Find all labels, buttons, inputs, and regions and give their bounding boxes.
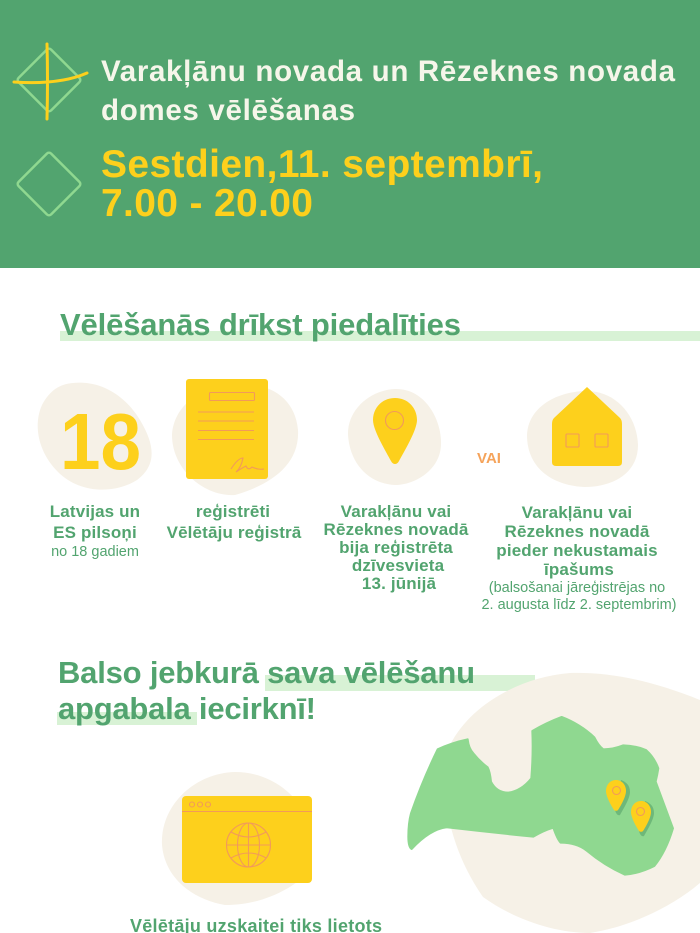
icon: house [552, 387, 622, 466]
label: Rēzeknes novadā [505, 522, 650, 541]
icon: document [186, 379, 268, 479]
label: dzīvesvieta [352, 556, 445, 575]
label: īpašums [543, 560, 614, 579]
blob [527, 391, 638, 487]
map shape [408, 717, 673, 875]
pins [606, 780, 654, 836]
label: Varakļānu vai [341, 502, 451, 521]
heading: who may participate: Vēlēšanās drīkst piedalīties [60, 307, 461, 342]
label: pieder nekustamais [496, 541, 658, 560]
label: ES pilsoņi [53, 523, 137, 542]
heading: who may participate [60, 307, 700, 342]
icon: ballot diamond with cross [14, 44, 87, 119]
header title: domes vēlēšanas [101, 94, 355, 127]
icon: map pin [373, 398, 417, 464]
blob [348, 389, 441, 485]
label: bija reģistrēta [339, 538, 453, 557]
blob [172, 384, 298, 495]
label: Latvijas un [50, 502, 140, 521]
label: (balsošanai jāreģistrējas no [489, 580, 665, 596]
label: 2. augusta līdz 2. septembrim) [481, 597, 677, 613]
item: residence [324, 389, 469, 593]
heading: vote at any polling station: apgabala iecirknī! [58, 691, 316, 726]
label: or: VAI [477, 450, 501, 467]
date and time: 7.00 - 20.00 [101, 182, 313, 225]
label: Varakļānu vai [522, 503, 632, 522]
item: voter register [167, 379, 302, 542]
header band [0, 0, 700, 268]
heading: vote at any polling station [57, 655, 535, 726]
icon: empty diamond [16, 151, 82, 217]
label: Rēzeknes novadā [324, 520, 469, 539]
blob [38, 383, 152, 490]
number 18: 18 [60, 397, 141, 486]
item: age 18 [38, 383, 152, 560]
blob [445, 673, 700, 933]
label: 13. jūnijā [362, 574, 437, 593]
icon: browser window [182, 796, 312, 883]
label: no 18 gadiem [51, 544, 139, 560]
header title: Varakļānu novada un Rēzeknes novada [101, 55, 676, 88]
date and time: Sestdien,11. septembrī, [101, 143, 543, 186]
item: property [481, 387, 677, 613]
item: online voter record [130, 772, 382, 933]
label: reģistrēti [196, 502, 270, 521]
blob [162, 772, 300, 905]
map of Latvia [408, 673, 700, 933]
label: Vēlētāju reģistrā [167, 523, 302, 542]
heading: vote at any polling station: Balso jebkurā sava vēlēšanu [58, 655, 475, 690]
